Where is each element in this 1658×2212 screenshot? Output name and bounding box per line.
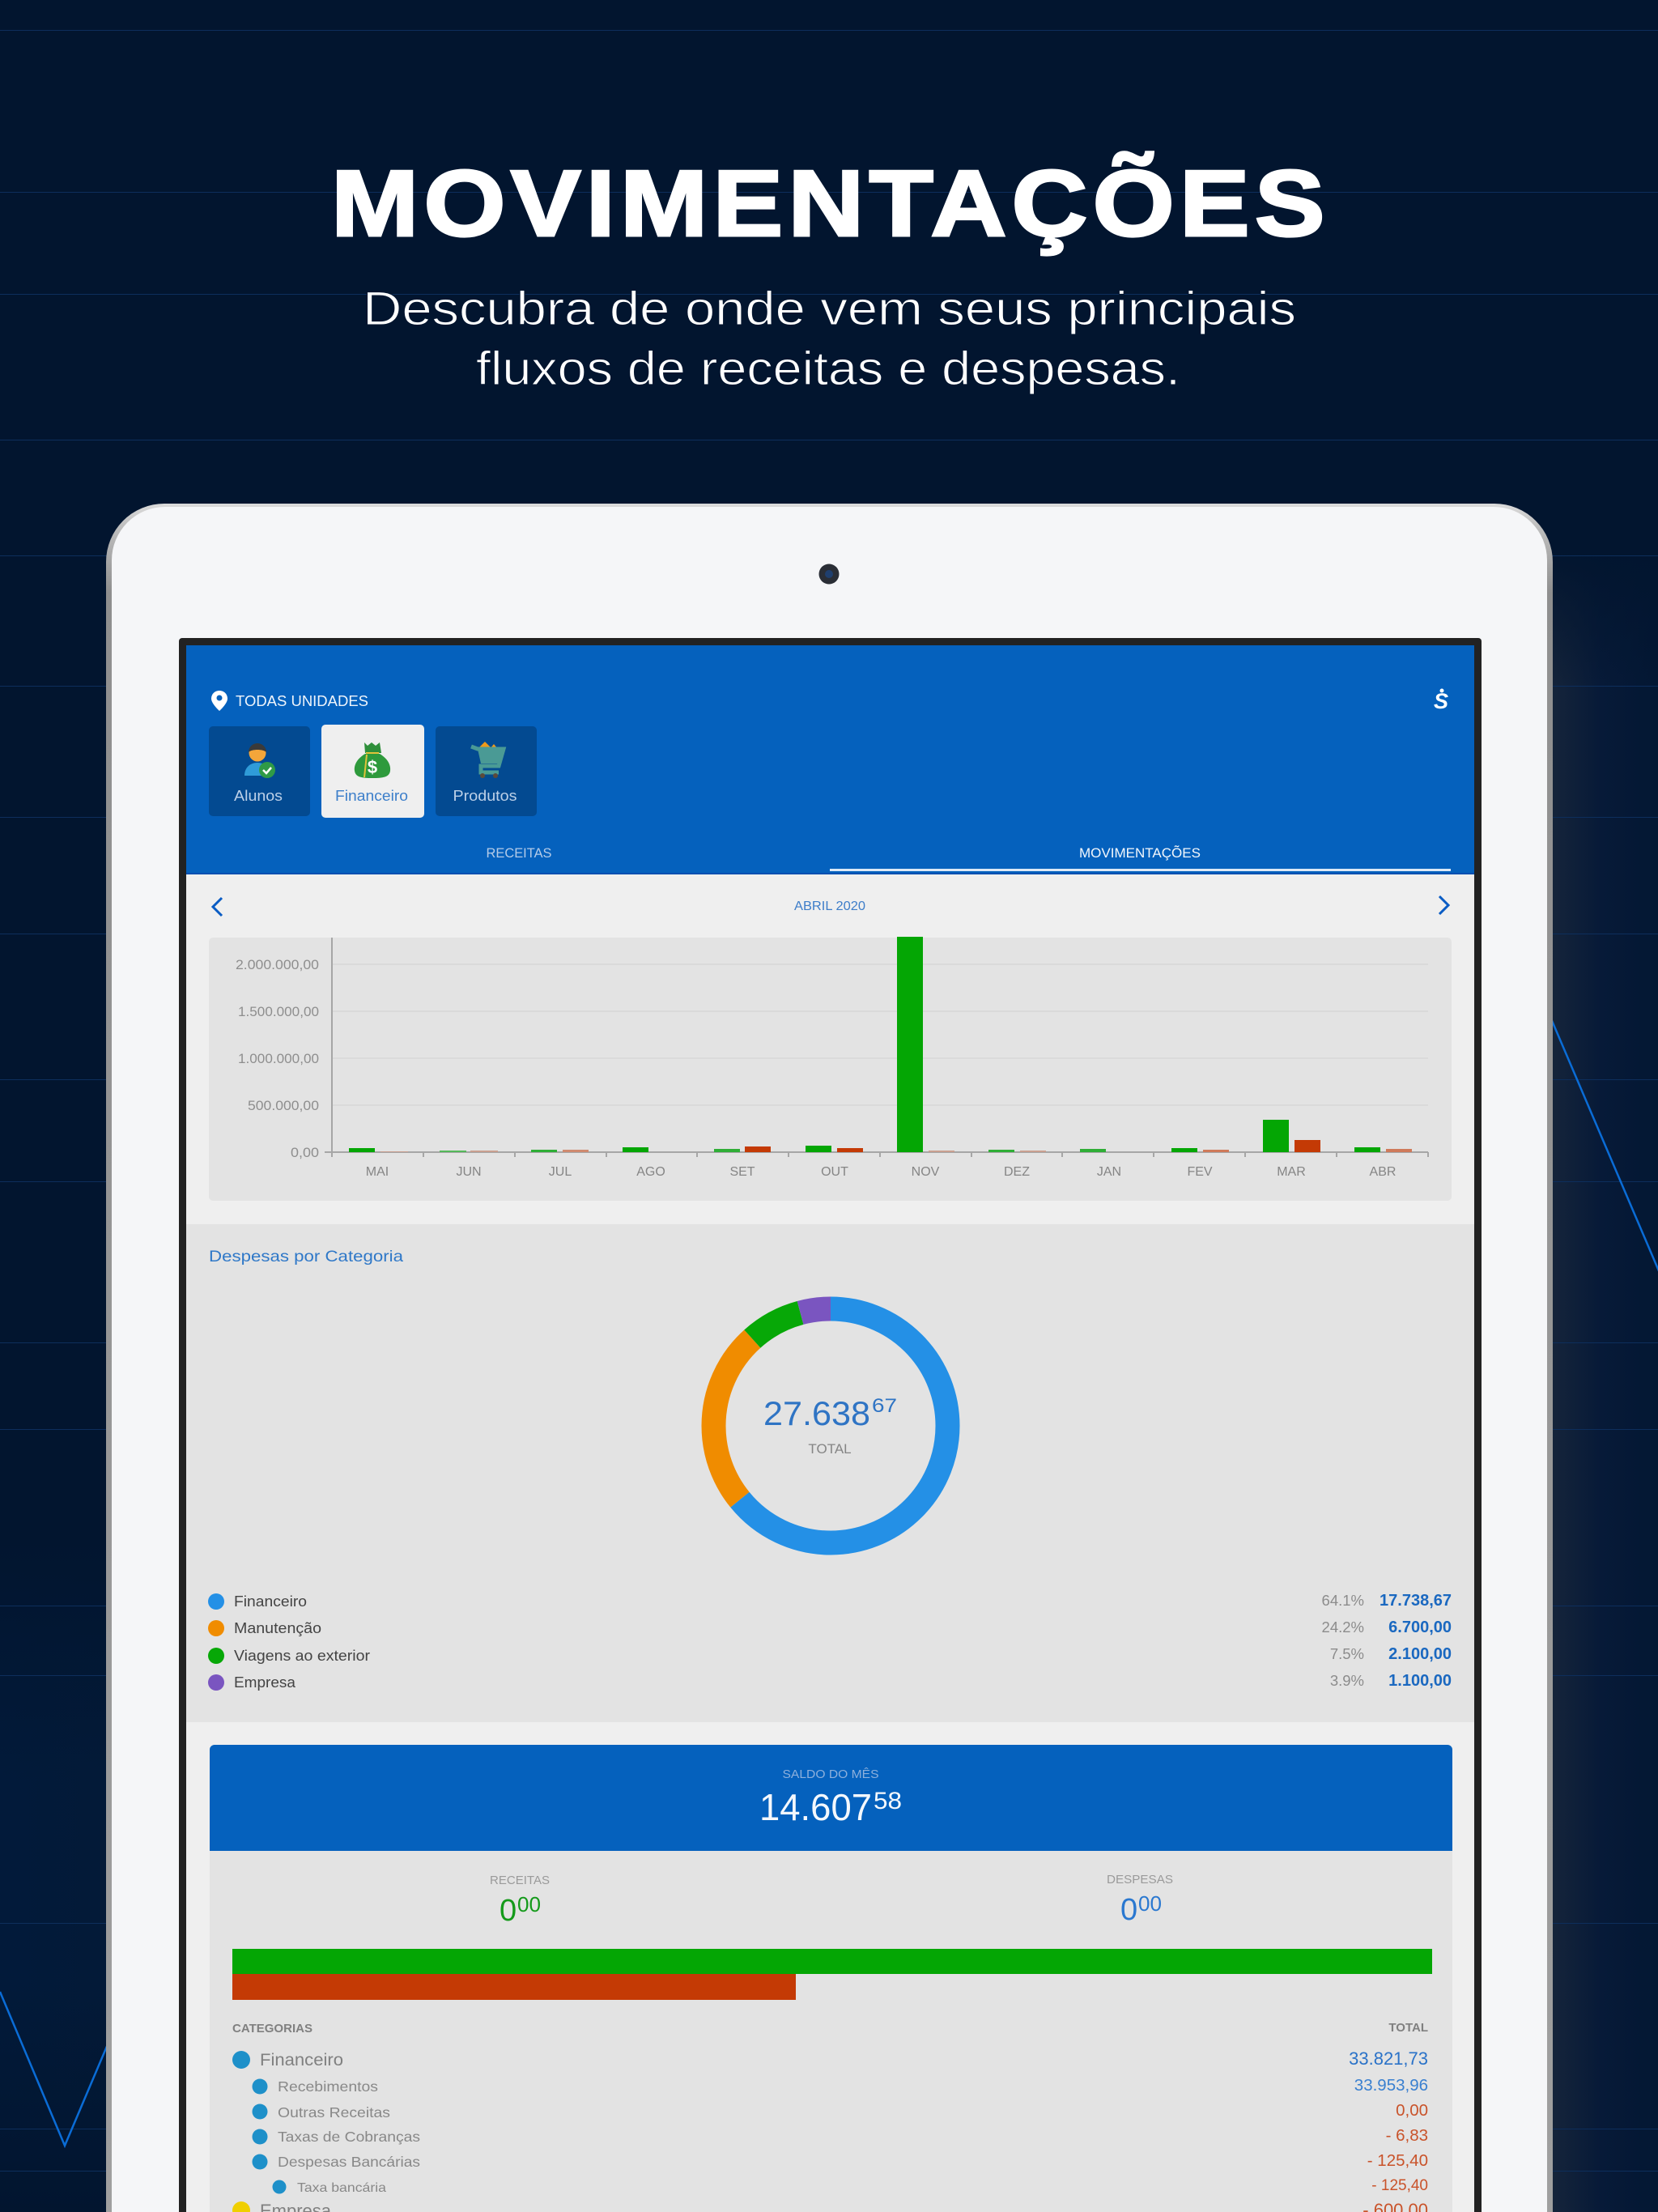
category list: 33.821,73 [1349,2048,1428,2069]
receitas total: 00 [517,1892,541,1916]
bar chart: SET [729,1165,755,1179]
donut total [765,1398,896,1453]
category list: CATEGORIAS [232,2022,312,2035]
receitas total: 0 [500,1894,517,1928]
donut total: 67 [872,1395,897,1417]
despesas total: 00 [1138,1891,1162,1916]
category list: Financeiro [260,2050,343,2069]
bar chart: 1.500.000,00 [238,1004,319,1019]
legend: 24.2% [1322,1619,1364,1636]
tile: Financeiro [321,725,424,818]
despesas total: 0 [1120,1893,1137,1927]
subtitle [363,283,1296,395]
bar chart: 0,00 [291,1145,319,1160]
tile: Financeiro: $ [368,757,377,777]
tablet device [106,504,1553,2212]
category list: Taxas de Cobranças [278,2129,420,2145]
heading: Despesas por Categoria [209,1248,403,1266]
month navigator [213,896,1448,916]
screen frame [179,638,1482,2212]
month navigator: ABRIL 2020 [794,900,865,913]
balance card: 58 [874,1788,902,1814]
donut total: TOTAL [808,1441,852,1457]
bar chart: MAR [1277,1165,1306,1179]
tab: movimentações [830,844,1451,871]
subtitle: fluxos de receitas e despesas. [476,342,1180,395]
balance card: SALDO DO MÊS [782,1767,879,1781]
legend [208,1592,1452,1691]
bar chart: AGO [636,1165,665,1179]
tile: Produtos [436,726,537,816]
category list: Recebimentos [278,2078,378,2095]
legend: 1.100,00 [1388,1672,1452,1690]
receitas total [491,1876,549,1921]
category list: Despesas Bancárias [278,2154,420,2170]
legend: 7.5% [1330,1645,1364,1662]
legend: Financeiro [234,1593,307,1610]
tile: Financeiro: Financeiro [335,788,408,804]
bar chart: 2.000.000,00 [236,957,319,972]
category list: Outras Receitas [278,2104,390,2121]
icon: camera [819,564,839,585]
tab: movimentações: MOVIMENTAÇÕES [1079,844,1201,861]
bar chart: JUN [456,1165,482,1179]
panel: saldo do mês [210,1745,1452,2212]
balance card [210,1745,1452,1851]
icon: location pin [211,691,227,711]
legend: Manutenção [234,1620,321,1636]
subtitle: Descubra de onde vem seus principais [363,283,1296,335]
receitas total: RECEITAS [490,1874,550,1887]
tile: Alunos: Alunos [234,788,283,804]
legend: Empresa [234,1674,296,1691]
category list: 33.953,96 [1354,2076,1428,2095]
despesas total: DESPESAS [1107,1873,1173,1887]
bar chart: MAI [366,1165,389,1179]
screen content [185,645,1474,2212]
bar chart: 500.000,00 [248,1098,319,1113]
icon: currency: S [1434,689,1448,713]
balance card: 14.607 [759,1786,872,1828]
legend: 6.700,00 [1388,1619,1452,1636]
panel: header [185,645,1474,874]
category list [232,2021,1428,2212]
donut chart [714,1308,947,1543]
unit label: TODAS UNIDADES [236,693,368,709]
title: MOVIMENTAÇÕES [331,151,1325,256]
bar chart: OUT [821,1165,848,1179]
despesas total [1107,1875,1172,1921]
panel: despesas por categoria [186,1224,1474,2212]
bar chart: DEZ [1004,1165,1030,1179]
tab: receitas: RECEITAS [486,846,552,861]
bar chart: JUL [549,1165,572,1179]
legend: 3.9% [1330,1672,1364,1689]
bar chart [209,937,1452,1201]
bar chart: NOV [912,1165,940,1179]
legend: Viagens ao exterior [234,1648,370,1664]
legend: 2.100,00 [1388,1645,1452,1663]
category list: 0,00 [1396,2101,1428,2120]
category list: Taxa bancária [297,2181,386,2195]
comparison bars [232,1949,1432,2000]
tile: Produtos: Produtos [453,788,517,804]
tablet bezel [106,504,1553,2212]
category list: - 125,40 [1371,2177,1428,2194]
legend: 64.1% [1322,1592,1364,1609]
category list: - 6,83 [1386,2126,1428,2145]
bar chart: 1.000.000,00 [238,1051,319,1066]
tile: Alunos [209,726,310,816]
donut total: 27.638 [763,1394,870,1432]
category list: TOTAL [1388,2021,1428,2035]
bar chart: ABR [1370,1165,1396,1179]
bar chart: FEV [1187,1165,1213,1179]
category list: - 125,40 [1367,2151,1428,2170]
legend: 17.738,67 [1380,1592,1452,1610]
decorative line chart strokes [0,1017,1658,2146]
bar chart: JAN [1097,1165,1121,1179]
